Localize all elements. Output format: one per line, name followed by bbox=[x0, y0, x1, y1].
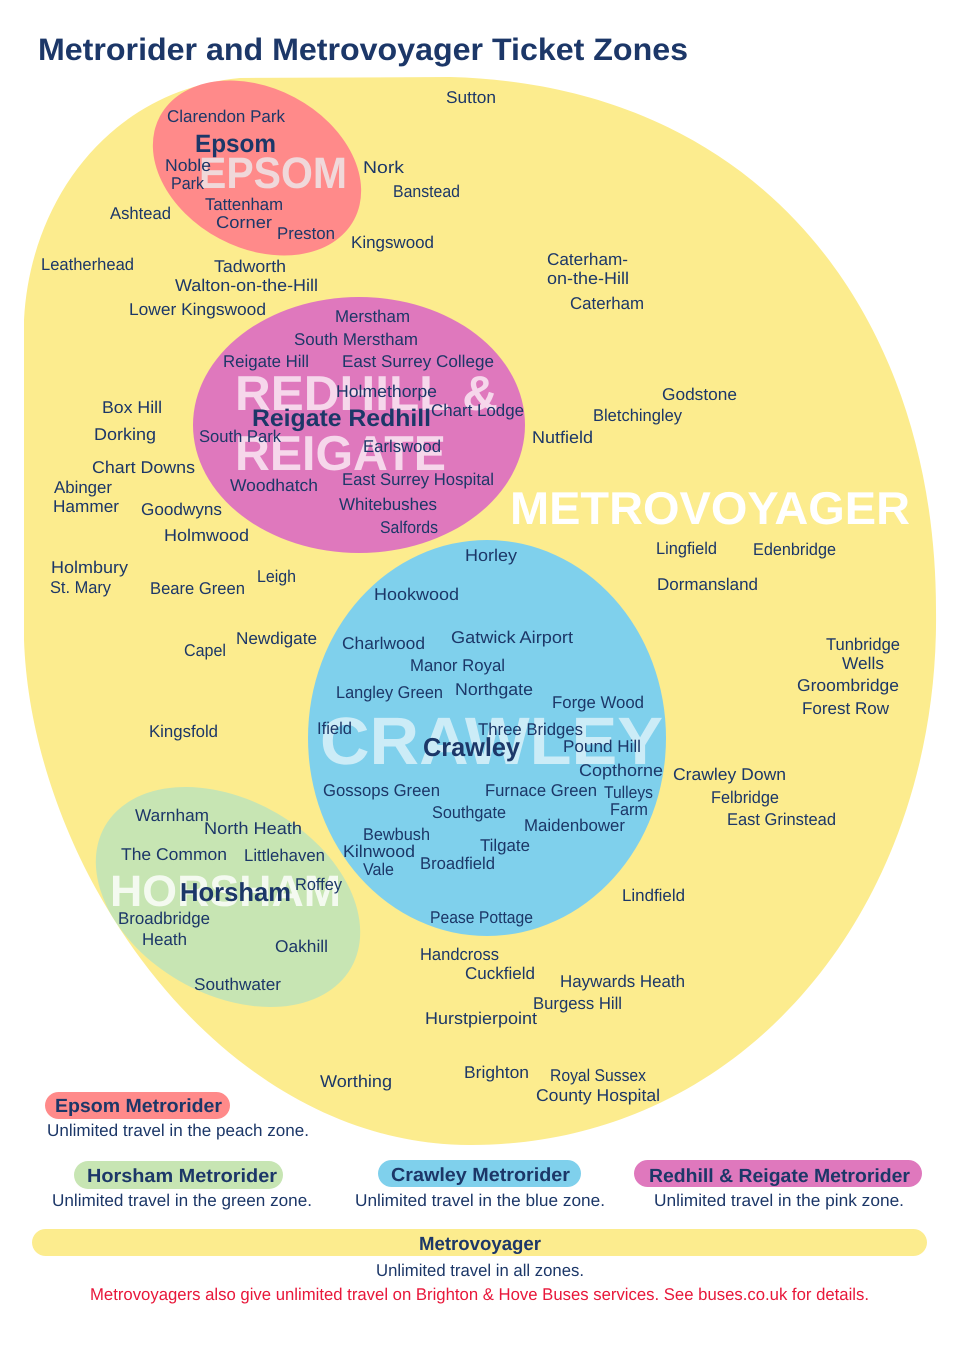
place names: Crawley zone bbox=[317, 546, 663, 927]
place names: Crawley zone: Manor Royal bbox=[410, 656, 505, 675]
place names: Metrovoyager zone: Bletchingley bbox=[593, 406, 682, 425]
place names: Metrovoyager zone: Royal Sussex bbox=[550, 1066, 646, 1085]
place names: Crawley zone: Ifield bbox=[317, 719, 352, 738]
place names: Metrovoyager zone: Nork bbox=[363, 158, 405, 177]
place names: Redhill and Reigate zone: Chart Lodge bbox=[431, 401, 524, 420]
place names: Redhill and Reigate zone: Merstham bbox=[335, 307, 410, 326]
place names: Horsham zone: Roffey bbox=[295, 875, 342, 894]
legend: Horsham Metrorider: Unlimited travel in the green zone. bbox=[52, 1191, 312, 1210]
place names: Metrovoyager zone: Handcross bbox=[420, 945, 499, 964]
place names: Metrovoyager zone: Haywards Heath bbox=[560, 972, 685, 991]
yellow zone shape bbox=[24, 77, 936, 1145]
place names: Metrovoyager zone: Dormansland bbox=[657, 575, 758, 594]
place names: Metrovoyager zone: Goodwyns bbox=[141, 500, 222, 519]
place names: Metrovoyager zone: Caterham- bbox=[547, 250, 628, 269]
place names: Crawley zone: Vale bbox=[363, 860, 394, 879]
place names: Redhill and Reigate zone: Woodhatch bbox=[230, 476, 318, 495]
place names: Horsham zone: Littlehaven bbox=[244, 846, 325, 865]
place names: Metrovoyager zone: Lindfield bbox=[622, 886, 685, 905]
legend: Crawley Metrorider: Unlimited travel in the blue zone. bbox=[355, 1191, 605, 1210]
place names: Redhill and Reigate zone: Reigate Hill bbox=[223, 352, 309, 371]
place names: Horsham zone: Broadbridge bbox=[118, 909, 210, 928]
zone watermark: REDHILL & REIGATE bbox=[235, 367, 498, 481]
place names: Epsom zone: Park bbox=[171, 174, 204, 193]
zone watermark: REDHILL & REIGATE: REDHILL & bbox=[235, 367, 498, 421]
zone watermark: REDHILL & REIGATE: REIGATE bbox=[235, 427, 446, 481]
place names: Metrovoyager zone: Sutton bbox=[446, 88, 496, 107]
place names: Metrovoyager zone: Kingsfold bbox=[149, 722, 218, 741]
panel: Redhill and Reigate zone bbox=[193, 297, 525, 553]
hub name: Crawley: Crawley bbox=[423, 732, 521, 762]
place names: Metrovoyager zone: Dorking bbox=[94, 425, 156, 444]
hub name: Epsom: Epsom bbox=[195, 130, 276, 158]
place names: Metrovoyager zone: Holmwood bbox=[164, 526, 249, 545]
place names: Metrovoyager zone: Cuckfield bbox=[465, 964, 535, 983]
place names: Metrovoyager zone: County Hospital bbox=[536, 1086, 660, 1105]
place names: Redhill and Reigate zone: Whitebushes bbox=[339, 495, 437, 514]
hub name: Horsham: Horsham bbox=[180, 877, 291, 907]
place names: Metrovoyager zone: East Grinstead bbox=[727, 810, 836, 829]
place names: Crawley zone: Tilgate bbox=[480, 836, 530, 855]
place names: Crawley zone: Forge Wood bbox=[552, 693, 644, 712]
place names: Metrovoyager zone: Newdigate bbox=[236, 629, 317, 648]
place names: Redhill and Reigate zone: East Surrey College bbox=[342, 352, 494, 371]
place names: Metrovoyager zone: Edenbridge bbox=[753, 540, 836, 559]
place names: Metrovoyager zone: Burgess Hill bbox=[533, 994, 622, 1013]
legend: Metrovoyager bbox=[32, 1229, 927, 1280]
legend: Metrovoyager: Unlimited travel in all zones. bbox=[376, 1261, 584, 1280]
place names: Horsham zone: Warnham bbox=[135, 806, 209, 825]
place names: Metrovoyager zone: St. Mary bbox=[50, 578, 111, 597]
place names: Horsham zone: Southwater bbox=[194, 975, 281, 994]
place names: Epsom zone bbox=[165, 107, 335, 243]
blue zone ellipse bbox=[308, 540, 666, 936]
zone watermark: CRAWLEY: CRAWLEY bbox=[320, 704, 663, 779]
place names: Crawley zone: Maidenbower bbox=[524, 816, 625, 835]
panel: Crawley zone bbox=[308, 540, 666, 936]
legend: Metrovoyager: Metrovoyager bbox=[419, 1234, 542, 1255]
place names: Horsham zone: Heath bbox=[142, 930, 187, 949]
place names: Crawley zone: Langley Green bbox=[336, 683, 443, 702]
legend: Redhill and Reigate Metrorider bbox=[634, 1160, 922, 1210]
zone watermark: HORSHAM: HORSHAM bbox=[110, 867, 341, 916]
note: Brighton and Hove Buses: Metrovoyagers also give unlimited travel on Brighton & Hove Buses services. See buses.co.uk for details. bbox=[90, 1285, 869, 1304]
place names: Epsom zone: Clarendon Park bbox=[167, 107, 285, 126]
place names: Metrovoyager zone: Forest Row bbox=[802, 699, 890, 718]
pink zone ellipse bbox=[193, 297, 525, 553]
place names: Redhill and Reigate zone: South Park bbox=[199, 427, 281, 446]
place names: Metrovoyager zone: Tunbridge bbox=[826, 635, 900, 654]
place names: Crawley zone: Southgate bbox=[432, 803, 506, 822]
place names: Metrovoyager zone: Brighton bbox=[464, 1063, 529, 1082]
place names: Metrovoyager zone: Caterham bbox=[570, 294, 644, 313]
zone watermark: EPSOM: EPSOM bbox=[199, 149, 347, 198]
legend: Epsom Metrorider: Epsom Metrorider bbox=[55, 1096, 223, 1117]
place names: Horsham zone: Oakhill bbox=[275, 937, 328, 956]
place names: Epsom zone: Preston bbox=[277, 224, 335, 243]
place names: Crawley zone: Horley bbox=[465, 546, 518, 565]
panel: Metrovoyager zone bbox=[24, 77, 936, 1145]
place names: Crawley zone: Pease Pottage bbox=[430, 908, 533, 927]
place names: Metrovoyager zone: Hammer bbox=[53, 497, 119, 516]
legend: Epsom Metrorider: Unlimited travel in the peach zone. bbox=[47, 1121, 309, 1140]
place names: Redhill and Reigate zone bbox=[199, 307, 524, 537]
green zone ellipse bbox=[57, 742, 399, 1052]
legend: Redhill and Reigate Metrorider: Unlimited travel in the pink zone. bbox=[654, 1191, 904, 1210]
place names: Metrovoyager zone: Ashtead bbox=[110, 204, 171, 223]
place names: Crawley zone: Broadfield bbox=[420, 854, 495, 873]
place names: Metrovoyager zone: Capel bbox=[184, 641, 226, 660]
place names: Metrovoyager zone: Lingfield bbox=[656, 539, 717, 558]
legend: Crawley Metrorider bbox=[355, 1160, 605, 1210]
place names: Redhill and Reigate zone: Salfords bbox=[380, 518, 438, 537]
place names: Metrovoyager zone: Holmbury bbox=[51, 558, 129, 577]
legend: Redhill and Reigate Metrorider: Redhill & Reigate Metrorider bbox=[649, 1166, 911, 1187]
panel: Epsom zone bbox=[122, 46, 392, 290]
place names: Metrovoyager zone: Kingswood bbox=[351, 233, 434, 252]
place names: Metrovoyager zone: Walton-on-the-Hill bbox=[175, 276, 318, 295]
place names: Crawley zone: Northgate bbox=[455, 680, 533, 699]
place names: Crawley zone: Farm bbox=[610, 800, 648, 819]
place names: Metrovoyager zone bbox=[41, 88, 900, 1105]
place names: Crawley zone: Tulleys bbox=[604, 783, 653, 802]
place names: Metrovoyager zone: on-the-Hill bbox=[547, 269, 629, 288]
place names: Crawley zone: Pound Hill bbox=[563, 737, 641, 756]
place names: Metrovoyager zone: Leigh bbox=[257, 567, 296, 586]
place names: Metrovoyager zone: Groombridge bbox=[797, 676, 899, 695]
place names: Horsham zone: The Common bbox=[121, 845, 227, 864]
place names: Metrovoyager zone: Nutfield bbox=[532, 428, 593, 447]
place names: Epsom zone: Corner bbox=[216, 213, 272, 232]
place names: Metrovoyager zone: Beare Green bbox=[150, 579, 245, 598]
place names: Crawley zone: Charlwood bbox=[342, 634, 425, 653]
zone watermark: METROVOYAGER: METROVOYAGER bbox=[510, 482, 910, 534]
place names: Metrovoyager zone: Worthing bbox=[320, 1072, 392, 1091]
place names: Crawley zone: Gossops Green bbox=[323, 781, 440, 800]
hub name: Reigate Redhill: Reigate Redhill bbox=[252, 405, 431, 432]
title: Metrorider and Metrovoyager Ticket Zones bbox=[38, 32, 688, 67]
place names: Metrovoyager zone: Lower Kingswood bbox=[129, 300, 266, 319]
place names: Metrovoyager zone: Godstone bbox=[662, 385, 737, 404]
place names: Metrovoyager zone: Chart Downs bbox=[92, 458, 195, 477]
peach zone ellipse bbox=[122, 46, 392, 290]
legend: Horsham Metrorider bbox=[52, 1161, 312, 1210]
place names: Crawley zone: Three Bridges bbox=[478, 720, 583, 739]
place names: Crawley zone: Copthorne bbox=[579, 761, 663, 780]
place names: Metrovoyager zone: Tadworth bbox=[214, 257, 286, 276]
place names: Crawley zone: Bewbush bbox=[363, 825, 430, 844]
place names: Metrovoyager zone: Wells bbox=[842, 654, 884, 673]
panel: Horsham zone bbox=[57, 742, 399, 1052]
place names: Redhill and Reigate zone: Holmethorpe bbox=[336, 382, 437, 401]
place names: Metrovoyager zone: Box Hill bbox=[102, 398, 162, 417]
legend: Horsham Metrorider: Horsham Metrorider bbox=[87, 1166, 278, 1187]
place names: Redhill and Reigate zone: Earlswood bbox=[363, 437, 441, 456]
legend: Crawley Metrorider: Crawley Metrorider bbox=[391, 1165, 571, 1186]
place names: Crawley zone: Gatwick Airport bbox=[451, 628, 573, 647]
place names: Metrovoyager zone: Hurstpierpoint bbox=[425, 1009, 537, 1028]
place names: Metrovoyager zone: Abinger bbox=[54, 478, 112, 497]
legend: Epsom Metrorider bbox=[45, 1092, 309, 1140]
place names: Metrovoyager zone: Banstead bbox=[393, 182, 460, 201]
place names: Horsham zone bbox=[118, 806, 342, 994]
place names: Redhill and Reigate zone: East Surrey Hospital bbox=[342, 470, 494, 489]
place names: Redhill and Reigate zone: South Merstham bbox=[294, 330, 418, 349]
place names: Horsham zone: North Heath bbox=[204, 819, 302, 838]
place names: Metrovoyager zone: Leatherhead bbox=[41, 255, 134, 274]
place names: Metrovoyager zone: Felbridge bbox=[711, 788, 779, 807]
place names: Crawley zone: Hookwood bbox=[374, 585, 459, 604]
place names: Epsom zone: Noble bbox=[165, 156, 211, 175]
place names: Crawley zone: Kilnwood bbox=[343, 842, 415, 861]
place names: Crawley zone: Furnace Green bbox=[485, 781, 597, 800]
place names: Metrovoyager zone: Crawley Down bbox=[673, 765, 786, 784]
place names: Epsom zone: Tattenham bbox=[205, 195, 283, 214]
